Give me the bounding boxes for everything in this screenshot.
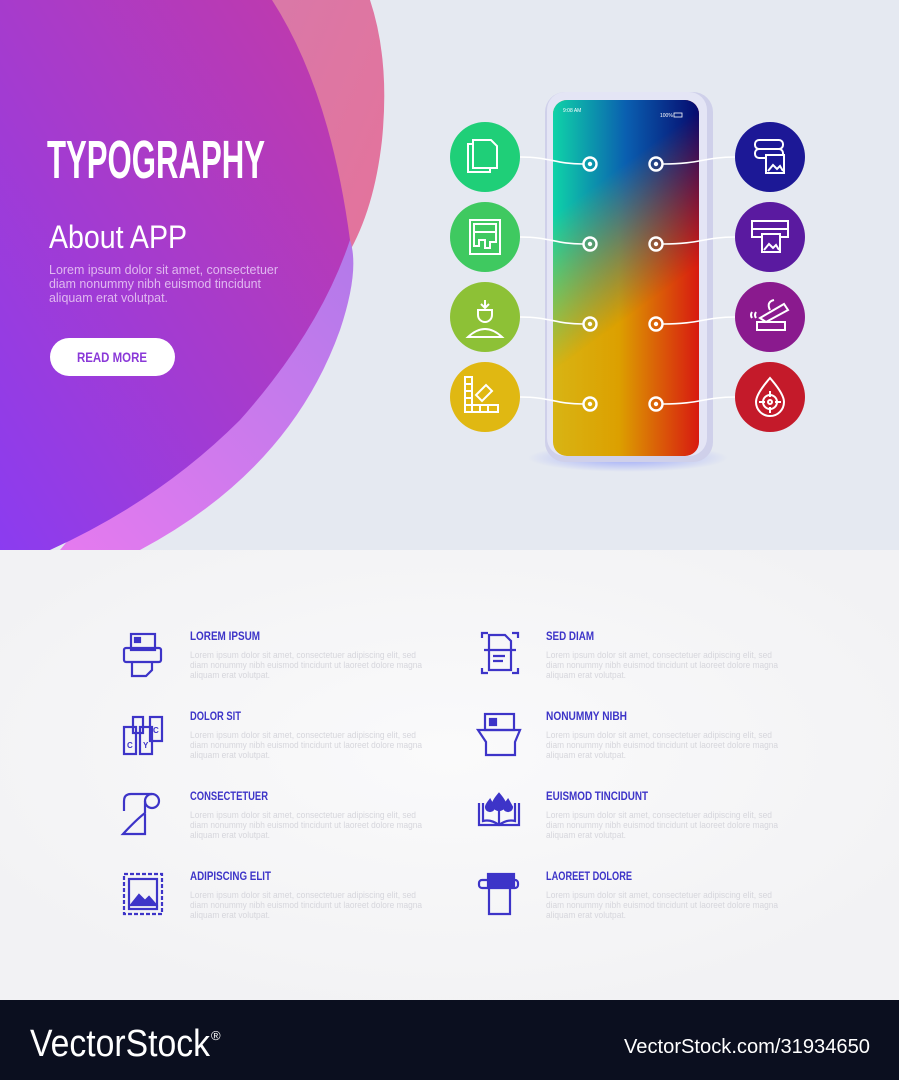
icon circle: photo printer	[735, 202, 805, 272]
feature list: diam nonummy nibh euismod tincidunt ut laoreet dolore magna	[546, 660, 779, 670]
feature list: aliquam erat volutpat.	[190, 910, 270, 920]
feature list: NONUMMY NIBH	[546, 709, 627, 723]
icon: printer	[124, 634, 161, 676]
feature list: diam nonummy nibh euismod tincidunt ut laoreet dolore magna	[546, 740, 779, 750]
subtitle: About APP	[49, 219, 187, 255]
icon circle: designer	[450, 282, 520, 352]
intro text: Lorem ipsum dolor sit amet, consectetuer	[49, 263, 278, 277]
feature list: diam nonummy nibh euismod tincidunt ut laoreet dolore magna	[190, 660, 423, 670]
feature list: aliquam erat volutpat.	[546, 830, 626, 840]
phone dots	[584, 158, 662, 410]
feature list: Lorem ipsum dolor sit amet, consectetuer adipiscing elit, sed	[546, 810, 772, 820]
feature list: LOREM IPSUM	[190, 629, 260, 643]
icon circle: swatches	[450, 362, 520, 432]
feature list: aliquam erat volutpat.	[190, 750, 270, 760]
feature list: diam nonummy nibh euismod tincidunt ut laoreet dolore magna	[190, 740, 423, 750]
feature list: aliquam erat volutpat.	[546, 910, 626, 920]
feature list: EUISMOD TINCIDUNT	[546, 789, 649, 803]
feature list: diam nonummy nibh euismod tincidunt ut laoreet dolore magna	[190, 820, 423, 830]
feature list	[190, 629, 779, 920]
icon: scan doc	[482, 633, 518, 673]
feature list: diam nonummy nibh euismod tincidunt ut laoreet dolore magna	[546, 900, 779, 910]
hero blobs	[0, 0, 384, 550]
feature list: aliquam erat volutpat.	[190, 670, 270, 680]
phone: 100%	[660, 113, 673, 119]
connectors	[520, 157, 735, 404]
top background	[0, 0, 899, 550]
icon: paper tube	[479, 874, 518, 914]
feature list: ADIPISCING ELIT	[190, 869, 272, 883]
icon circle: iron	[735, 282, 805, 352]
phone	[539, 92, 716, 470]
icon circle: roll print	[735, 122, 805, 192]
title: TYPOGRAPHY	[47, 130, 265, 190]
button: read more	[50, 338, 175, 376]
footer logo: VectorStock	[30, 1023, 211, 1065]
feature list: Lorem ipsum dolor sit amet, consectetuer adipiscing elit, sed	[546, 650, 772, 660]
list icons	[123, 633, 520, 914]
feature list: Lorem ipsum dolor sit amet, consectetuer adipiscing elit, sed	[190, 810, 416, 820]
icon: ink bottles	[124, 717, 162, 754]
footer	[0, 1000, 899, 1080]
feature list: Lorem ipsum dolor sit amet, consectetuer adipiscing elit, sed	[546, 730, 772, 740]
feature list: CONSECTETUER	[190, 789, 268, 803]
feature list: Lorem ipsum dolor sit amet, consectetuer adipiscing elit, sed	[190, 730, 416, 740]
icon circle: print scan	[450, 202, 520, 272]
intro text	[49, 263, 278, 305]
feature list: aliquam erat volutpat.	[546, 750, 626, 760]
icon: folder photo	[478, 714, 520, 755]
icon: image crop	[124, 874, 162, 914]
icon circle: ink target	[735, 362, 805, 432]
icon: book drops	[479, 794, 519, 825]
feature list: diam nonummy nibh euismod tincidunt ut laoreet dolore magna	[546, 820, 779, 830]
icon: ink bottles: C	[127, 741, 133, 750]
feature list: SED DIAM	[546, 629, 594, 643]
icon circle: pages	[450, 122, 520, 192]
feature list: LAOREET DOLORE	[546, 869, 632, 883]
feature list: aliquam erat volutpat.	[190, 830, 270, 840]
feature list: Lorem ipsum dolor sit amet, consectetuer adipiscing elit, sed	[190, 890, 416, 900]
intro text: diam nonummy nibh euismod tincidunt	[49, 277, 262, 291]
icon: paper roll	[123, 794, 159, 834]
icon: ink bottles: C	[153, 726, 159, 735]
feature list: diam nonummy nibh euismod tincidunt ut laoreet dolore magna	[190, 900, 423, 910]
feature list: DOLOR SIT	[190, 709, 242, 723]
button: read more: READ MORE	[77, 349, 147, 365]
feature list: Lorem ipsum dolor sit amet, consectetuer adipiscing elit, sed	[190, 650, 416, 660]
feature list: Lorem ipsum dolor sit amet, consectetuer adipiscing elit, sed	[546, 890, 772, 900]
footer url: VectorStock.com/31934650	[624, 1036, 870, 1058]
bottom background	[0, 550, 899, 1000]
intro text: aliquam erat volutpat.	[49, 291, 168, 305]
phone: 9:08 AM	[563, 108, 581, 114]
feature list: aliquam erat volutpat.	[546, 670, 626, 680]
icon: ink bottles: Y	[143, 741, 149, 750]
text: ®	[211, 1028, 221, 1043]
